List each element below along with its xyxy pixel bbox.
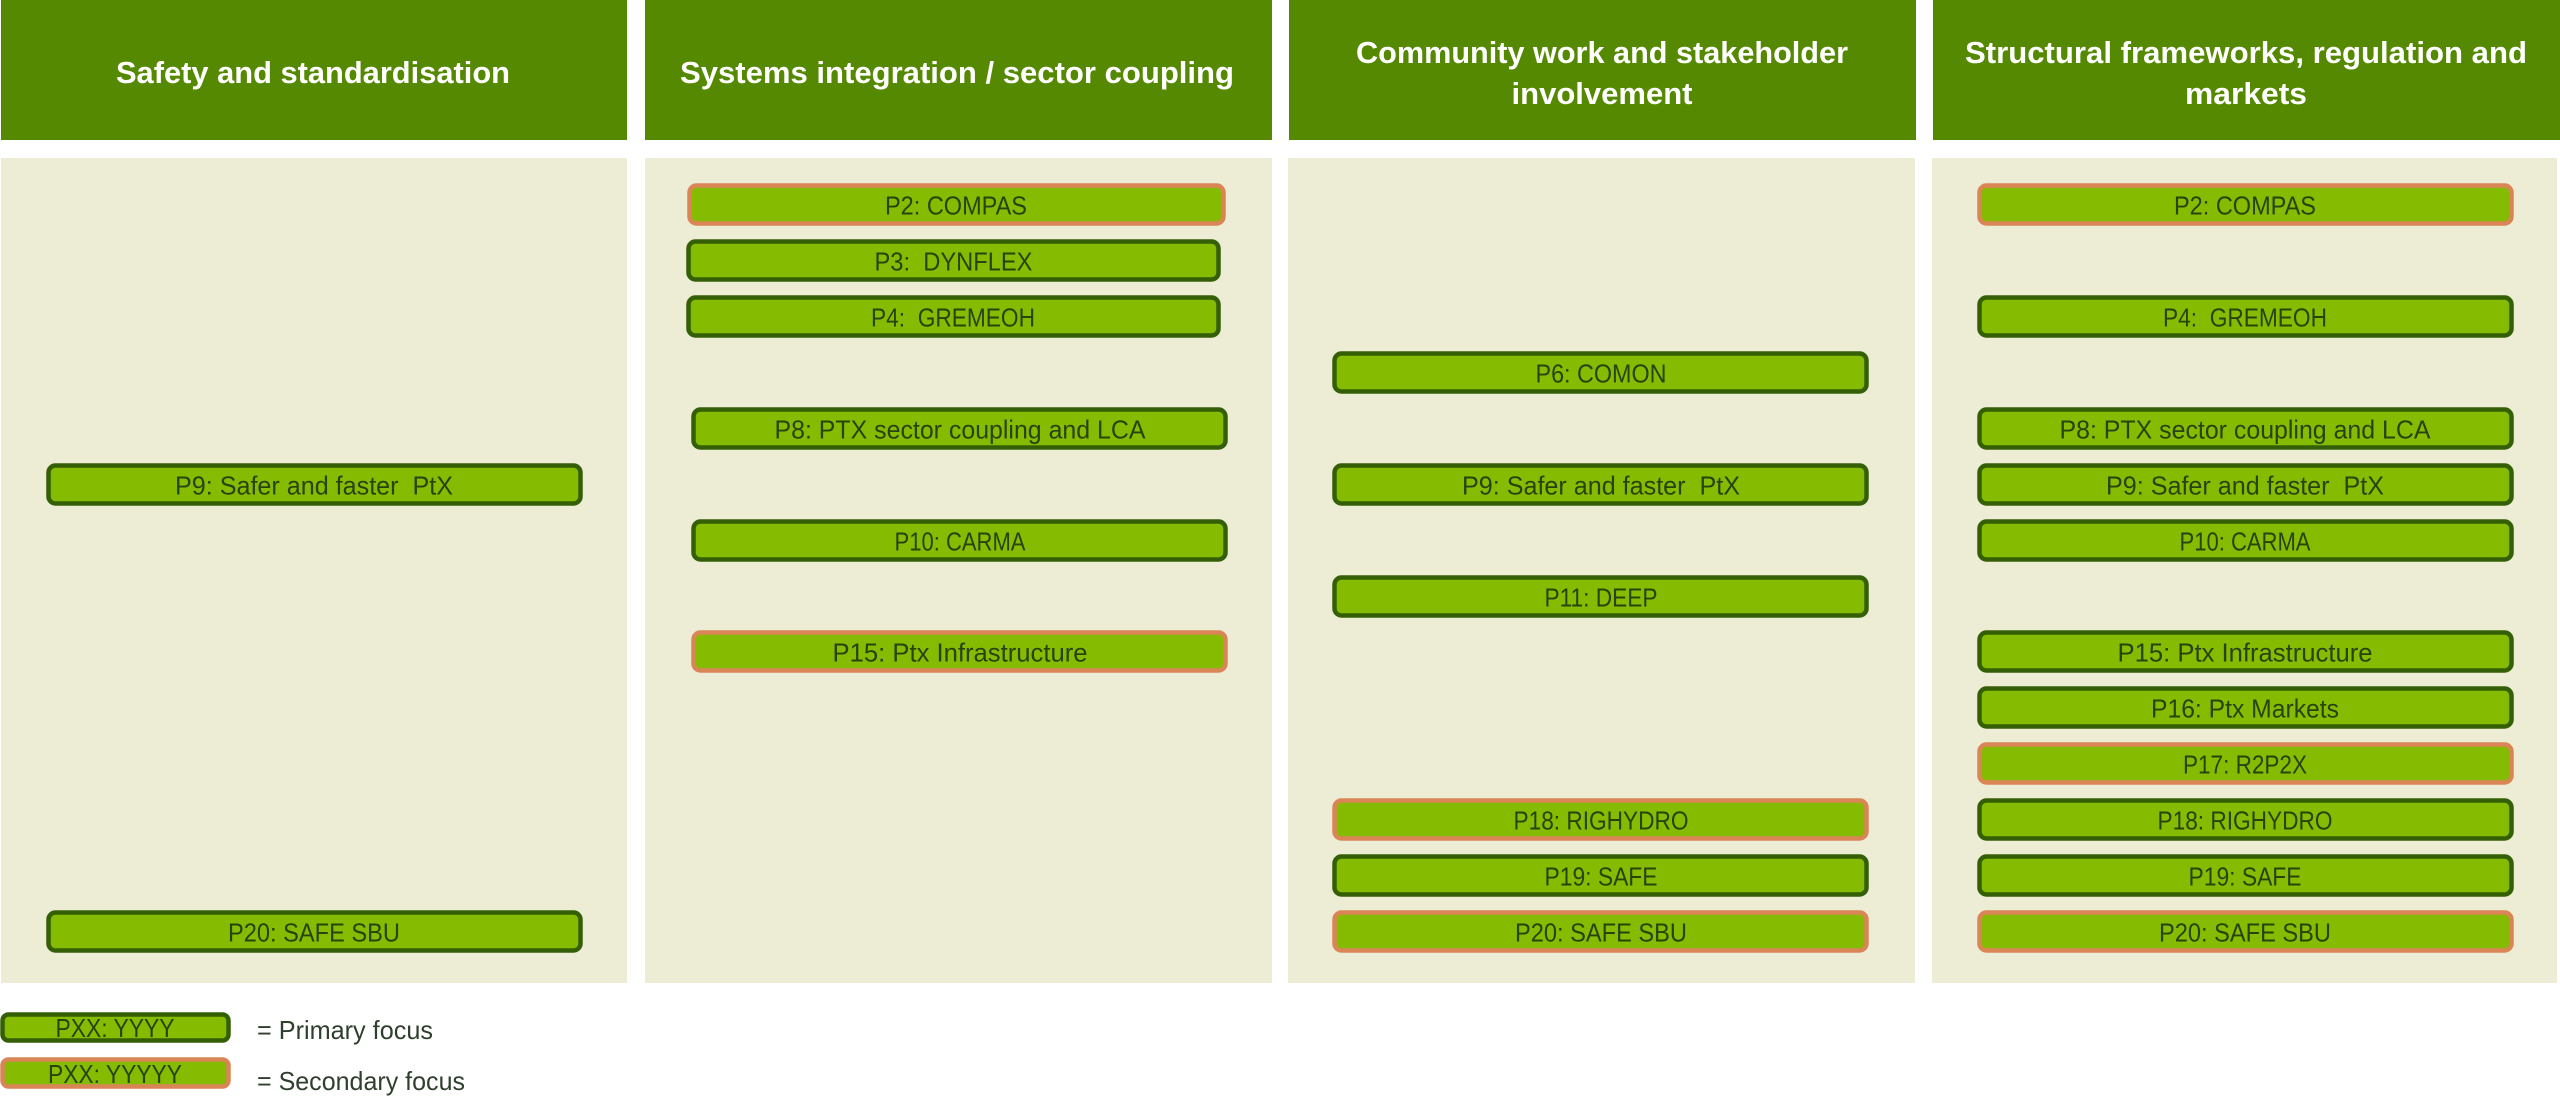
project: P10 — [694, 522, 1226, 560]
project: P15: P15: Ptx Infrastructure — [2118, 638, 2372, 668]
project: P20 — [1334, 912, 1866, 950]
legend: primary focus: = Primary focus — [257, 1015, 433, 1045]
project: P19 — [1980, 856, 2512, 894]
project: P4: P4: GREMEOH — [2163, 302, 2327, 332]
project: P16 — [1980, 688, 2512, 726]
header: Safety and standardisation: Safety and standardisation — [116, 55, 510, 90]
column: Community work — [1288, 0, 1916, 983]
project: P6: P6: COMON — [1536, 358, 1666, 388]
panel: safety — [1, 158, 627, 983]
project: P15 — [694, 632, 1226, 670]
column: Safety and standardisation — [1, 0, 627, 983]
project: P6 — [1334, 354, 1866, 392]
project: P3: P3: DYNFLEX — [874, 246, 1032, 276]
panel: systems — [645, 158, 1272, 983]
project: P19: P19: SAFE — [2188, 862, 2302, 892]
project: P11: P11: DEEP — [1544, 582, 1658, 612]
project: P9 — [48, 466, 580, 504]
project: P4 — [688, 298, 1218, 336]
project: P9 — [1334, 466, 1866, 504]
header: Structural frameworks: markets — [2185, 76, 2307, 111]
project: P20 — [1980, 912, 2512, 950]
project: P9: P9: Safer and faster PtX — [175, 470, 453, 500]
legend: secondary focus: PXX: YYYYY — [48, 1059, 182, 1089]
project: P10: P10: CARMA — [2180, 526, 2311, 556]
project: P20: P20: SAFE SBU — [2159, 918, 2331, 948]
project: P20: P20: SAFE SBU — [1515, 918, 1687, 948]
legend: secondary focus — [2, 1059, 465, 1096]
header: Structural frameworks: Structural frameworks, regulation and — [1965, 35, 2527, 70]
header: Systems integration — [645, 0, 1272, 140]
header: Community work — [1289, 0, 1916, 140]
project: P18: P18: RIGHYDRO — [1514, 806, 1688, 836]
project: P18 — [1334, 800, 1866, 838]
project: P20: P20: SAFE SBU — [228, 918, 400, 948]
column: Systems integration — [645, 0, 1272, 983]
legend: primary focus: PXX: YYYY — [56, 1013, 174, 1043]
panel: community — [1288, 158, 1915, 983]
column: Structural frameworks — [1932, 0, 2560, 983]
project: P3 — [688, 242, 1218, 280]
project: P8 — [694, 410, 1226, 448]
project: P9: P9: Safer and faster PtX — [2106, 470, 2384, 500]
project: P17 — [1980, 744, 2512, 782]
project: P8: P8: PTX sector coupling and LCA — [2060, 414, 2431, 444]
header: Safety and standardisation — [1, 0, 627, 140]
project: P15: P15: Ptx Infrastructure — [832, 638, 1088, 668]
project: P8 — [1980, 410, 2512, 448]
header: Community work: involvement — [1512, 76, 1692, 111]
panel: structural — [1932, 158, 2557, 983]
project: P2: P2: COMPAS — [885, 190, 1027, 220]
project: P9 — [1980, 466, 2512, 504]
project: P2 — [690, 186, 1224, 224]
legend: secondary focus: = Secondary focus — [257, 1066, 465, 1096]
project: P8: P8: PTX sector coupling and LCA — [774, 414, 1146, 444]
legend — [2, 1013, 465, 1096]
project: P4 — [1980, 298, 2512, 336]
project: P19: P19: SAFE — [1544, 862, 1658, 892]
project: P19 — [1334, 856, 1866, 894]
project: P9: P9: Safer and faster PtX — [1462, 470, 1740, 500]
project: P15 — [1980, 632, 2512, 670]
project: P18: P18: RIGHYDRO — [2158, 806, 2332, 836]
project: P10: P10: CARMA — [894, 526, 1026, 556]
legend: primary focus — [2, 1013, 433, 1045]
project: P10 — [1980, 522, 2512, 560]
project: P11 — [1334, 578, 1866, 616]
header: Community work: Community work and stakeholder — [1356, 35, 1848, 70]
project: P2 — [1980, 186, 2512, 224]
project: P18 — [1980, 800, 2512, 838]
project: P20 — [48, 912, 580, 950]
header: Structural frameworks — [1933, 0, 2560, 140]
project: P16: P16: Ptx Markets — [2151, 694, 2339, 724]
project: P2: P2: COMPAS — [2174, 190, 2316, 220]
project: P4: P4: GREMEOH — [871, 302, 1035, 332]
header: Systems integration: Systems integration / sector coupling — [680, 55, 1234, 90]
project: P17: P17: R2P2X — [2183, 750, 2307, 780]
